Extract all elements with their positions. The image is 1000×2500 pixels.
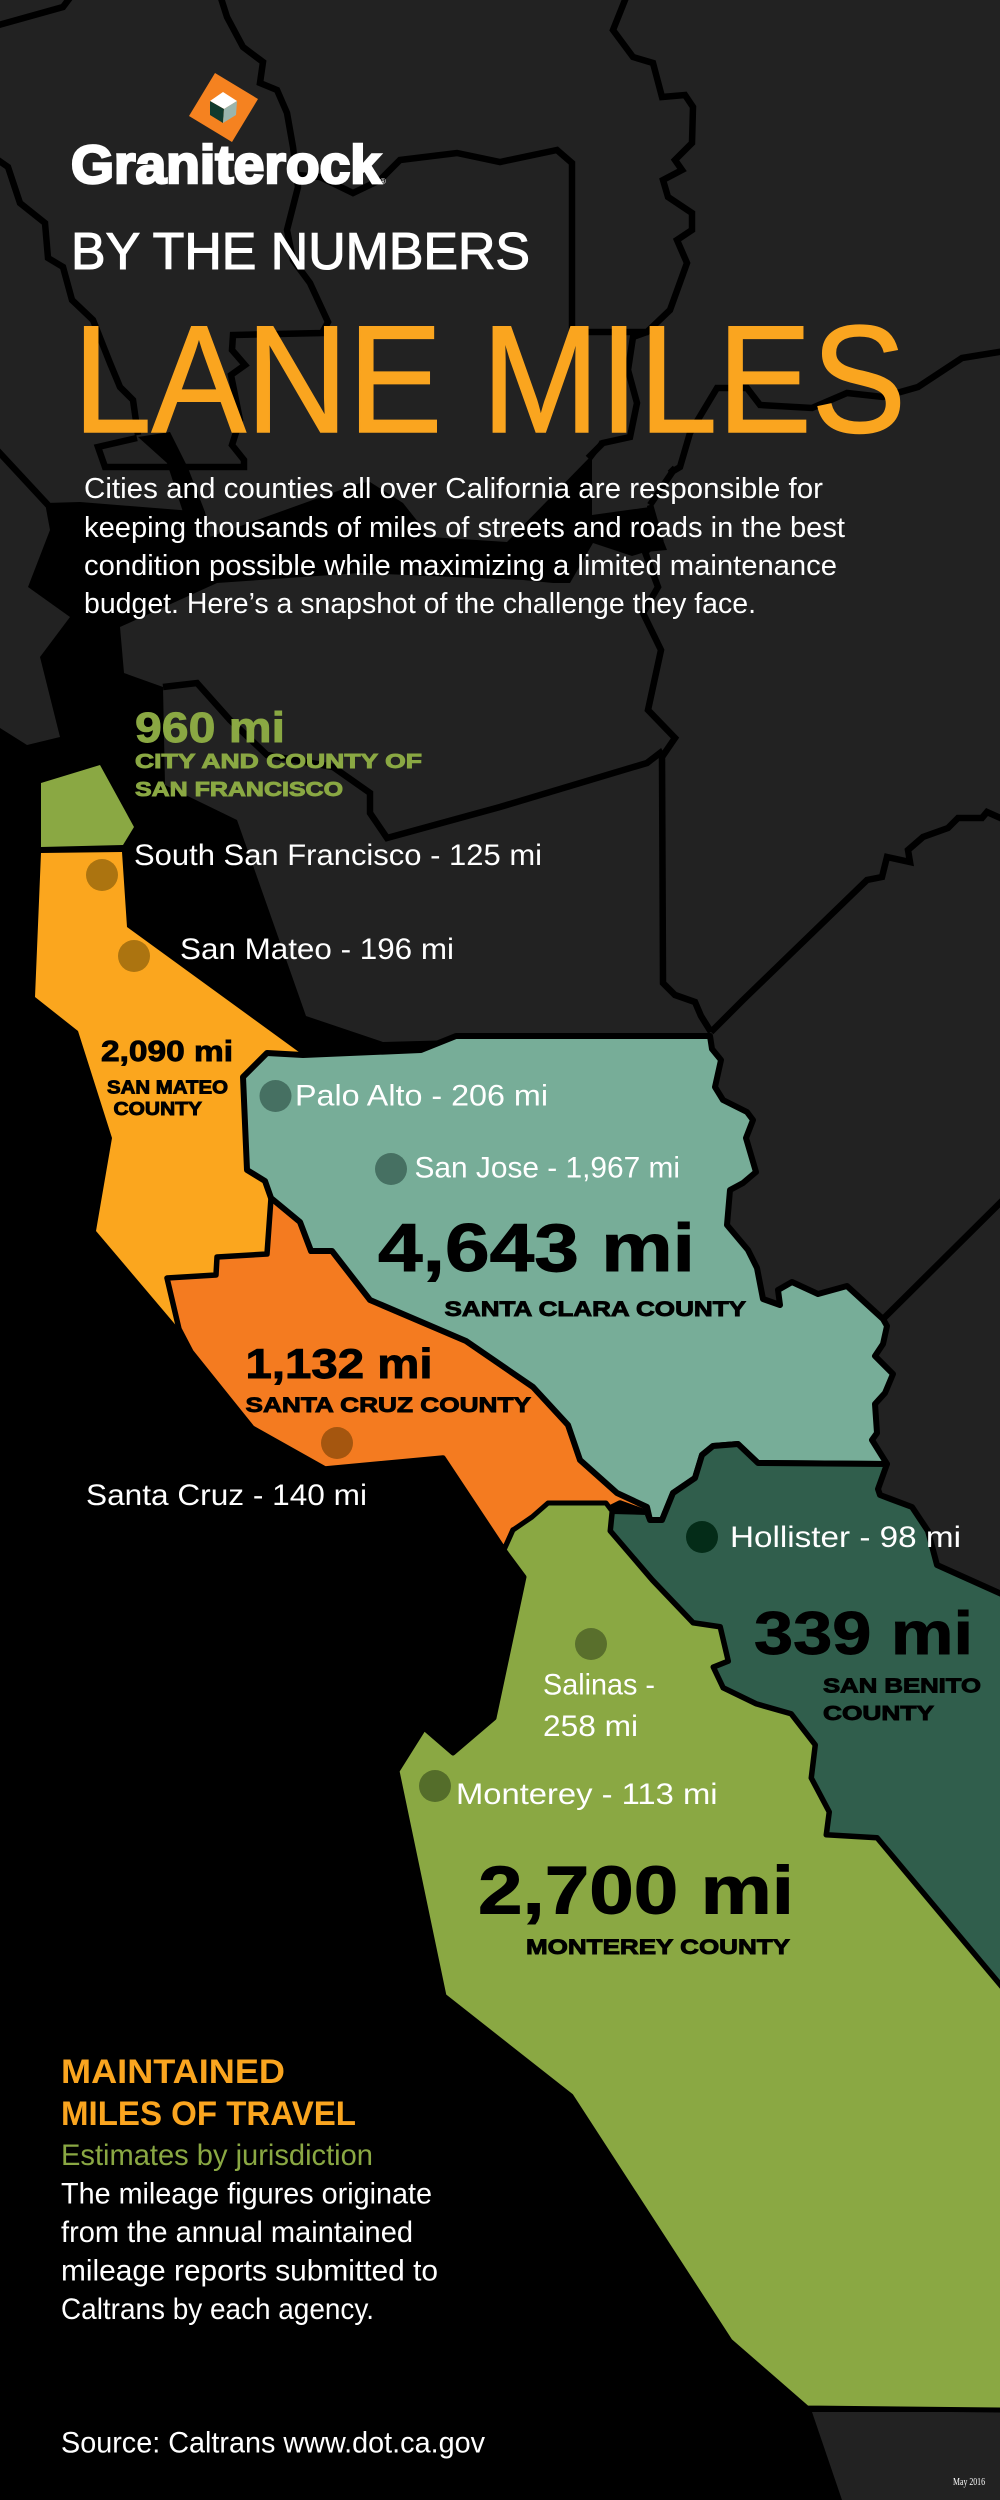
date note: May 2016 — [953, 2477, 985, 2488]
label: San Francisco total — [135, 704, 422, 801]
label: Palo Alto: Palo Alto - 206 mi — [295, 1080, 548, 1112]
county boundary lines on surrounding land — [0, 0, 1000, 1319]
label: South San Francisco: South San Francisco - 125 mi — [134, 839, 542, 872]
label: San Mateo County total: COUNTY — [114, 1098, 203, 1119]
label: Salinas — [543, 1668, 655, 1743]
explanatory text block: Caltrans by each agency. — [61, 2293, 374, 2326]
label: Salinas: 258 mi — [543, 1710, 638, 1743]
intro text block: Cities and counties all over California are responsible for — [84, 473, 823, 505]
region: Santa Cruz County — [167, 1198, 647, 1550]
heading: maintained miles of travel — [61, 2053, 356, 2133]
label: San Francisco total: 960 mi — [135, 704, 285, 752]
intro text block: budget. Here’s a snapshot of the challenge they face. — [84, 588, 756, 620]
source line: Source: Caltrans www.dot.ca.gov — [61, 2427, 485, 2460]
region: City and County of San Francisco — [41, 765, 134, 847]
title: lane miles: LANE MILES — [73, 294, 906, 465]
label: San Benito County total: SAN BENITO — [823, 1676, 981, 1698]
explanatory text block: The mileage figures originate — [61, 2178, 432, 2210]
label: San Benito County total: COUNTY — [823, 1703, 935, 1725]
label: San Benito County total — [754, 1600, 981, 1725]
explanatory text block: from the annual maintained — [61, 2216, 413, 2249]
label: Santa Cruz County total: 1,132 mi — [246, 1340, 432, 1387]
label: Santa Cruz County total: SANTA CRUZ COUNTY — [246, 1394, 531, 1417]
subheading: estimates by jurisdiction: Estimates by jurisdiction — [61, 2139, 373, 2172]
heading: maintained miles of travel: MAINTAINED — [61, 2053, 285, 2091]
logo wordmark: Graniterock — [71, 135, 382, 195]
label: Monterey County total: MONTEREY COUNTY — [526, 1936, 790, 1959]
label: San Mateo County total: SAN MATEO — [107, 1076, 228, 1098]
explanatory text block — [61, 2178, 438, 2326]
intro text block: keeping thousands of miles of streets and roads in the best — [84, 512, 845, 544]
bay wedge — [138, 432, 205, 512]
region: Monterey County — [397, 1503, 1000, 2410]
region: San Mateo County — [35, 852, 303, 1329]
logo wordmark: ® — [380, 177, 386, 186]
city location dots — [86, 859, 718, 1802]
intro text block — [84, 473, 845, 620]
intro text block: condition possible while maximizing a limited maintenance — [84, 550, 837, 582]
label: Santa Cruz city: Santa Cruz - 140 mi — [86, 1479, 367, 1512]
label: San Benito County total: 339 mi — [754, 1600, 973, 1667]
heading: maintained miles of travel: MILES OF TRAVEL — [61, 2095, 356, 2133]
label: Monterey County total — [478, 1852, 794, 1959]
region: Santa Clara County — [243, 1036, 893, 1520]
label: San Francisco total: CITY AND COUNTY OF — [135, 751, 422, 773]
label: San Mateo city: San Mateo - 196 mi — [180, 933, 454, 966]
label: Santa Cruz County total — [246, 1340, 531, 1417]
explanatory text block: mileage reports submitted to — [61, 2254, 438, 2288]
label: San Mateo County total — [101, 1036, 233, 1119]
label: Salinas: Salinas - — [543, 1668, 655, 1702]
label: San Mateo County total: 2,090 mi — [101, 1036, 233, 1068]
label: Santa Clara County total: 4,643 mi — [378, 1210, 695, 1286]
region: San Benito County — [610, 1444, 1000, 1992]
label: Monterey County total: 2,700 mi — [478, 1852, 794, 1928]
icon: Graniterock logo diamond and cube — [189, 73, 258, 142]
label: Hollister: Hollister - 98 mi — [730, 1521, 961, 1554]
label: Monterey city: Monterey - 113 mi — [456, 1778, 718, 1811]
label: San Francisco total: SAN FRANCISCO — [135, 779, 343, 801]
label: Santa Clara County total — [378, 1210, 746, 1321]
label: Santa Clara County total: SANTA CLARA COUNTY — [444, 1298, 746, 1321]
label: San Jose: San Jose - 1,967 mi — [414, 1152, 680, 1184]
heading: by the numbers: BY THE NUMBERS — [71, 223, 530, 281]
